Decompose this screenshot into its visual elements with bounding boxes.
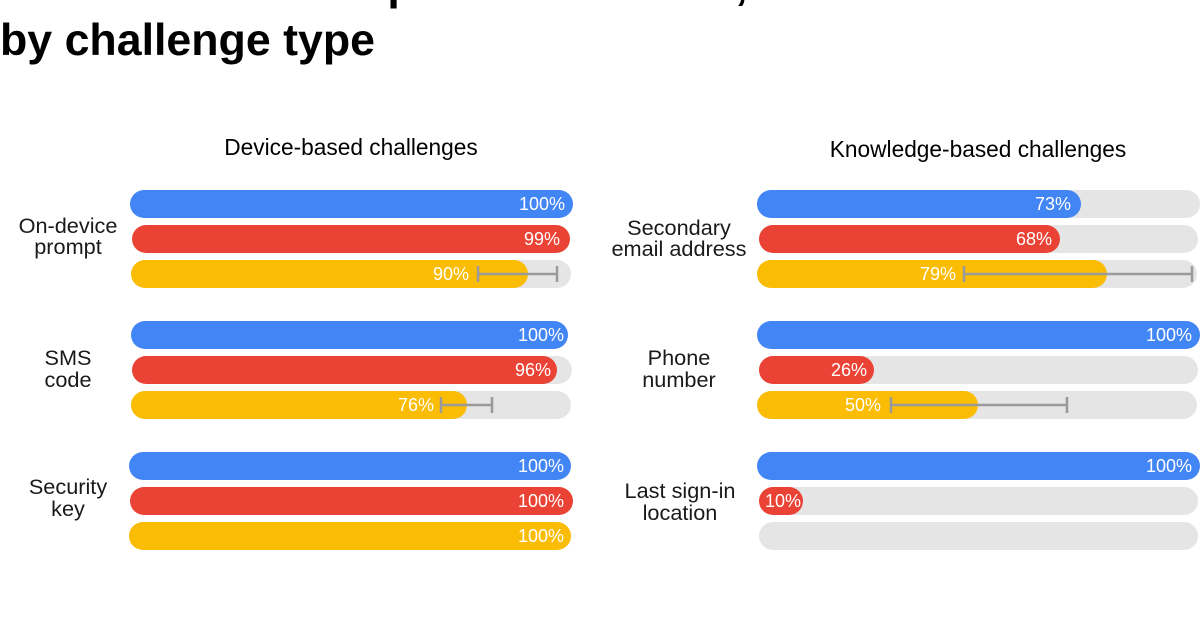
bar: blue 100%: 100% [518,456,564,476]
bar: blue 100%: 100% [519,194,565,214]
bar: red 96%: 96% [515,360,551,380]
bar: yellow 50%: 50% [845,395,881,415]
bar: red 100% [130,487,573,515]
bar: yellow 76% [131,391,571,419]
bar: red 96% [132,356,572,384]
bar: blue 100%: 100% [1146,325,1192,345]
bar: blue 73%: 73% [1035,194,1071,214]
bar: blue 100%: 100% [518,325,564,345]
group: secondary email address [611,190,1200,288]
bar: yellow 90% [131,260,571,288]
group: phone number [642,321,1200,419]
bar: blue 100%: 100% [1146,456,1192,476]
label: Last sign-in [625,478,735,503]
bar: empty [759,522,1198,550]
bar: red 100%: 100% [518,491,564,511]
bar: blue 73% [757,190,1200,218]
bar: red 26%: 26% [831,360,867,380]
bar: blue 100% [131,321,568,349]
bar: blue 100% [757,321,1200,349]
label: Phone [648,345,710,370]
title: by challenge type [0,16,375,65]
group: SMS code [44,321,572,419]
label: location [643,500,717,525]
label: SMS [44,345,92,370]
heading: knowledge-based challenges: Knowledge-based challenges [830,136,1126,162]
label: code [44,367,92,392]
label: prompt [34,234,102,259]
bar: red 99%: 99% [524,229,560,249]
bar: yellow 100%: 100% [518,526,564,546]
bar: red 26% [759,356,1198,384]
bar: yellow 90%: 90% [433,264,469,284]
bar: red 10% [759,487,1198,515]
heading: device-based challenges: Device-based challenges [224,134,478,160]
bar: yellow 79%: 79% [920,264,956,284]
bar: yellow 79% [757,260,1197,288]
bar: yellow 76%: 76% [398,395,434,415]
bar: yellow 100% [129,522,571,550]
label: number [642,367,716,392]
bar: red 68%: 68% [1016,229,1052,249]
bar: blue 100% [130,190,573,218]
group: on-device prompt [19,190,573,288]
label: Security [29,474,107,499]
group: security key [29,452,573,550]
bar: red 99% [132,225,570,253]
label: email address [611,236,747,261]
group: last sign-in location [625,452,1200,550]
bar: blue 100% [129,452,571,480]
label: Secondary [627,215,731,240]
label: On-device [19,213,117,238]
label: key [51,496,85,521]
bar: red 68% [759,225,1198,253]
bar: yellow 50% [757,391,1197,419]
title [0,0,748,65]
bar: red 10%: 10% [765,491,801,511]
bar: blue 100% [757,452,1200,480]
